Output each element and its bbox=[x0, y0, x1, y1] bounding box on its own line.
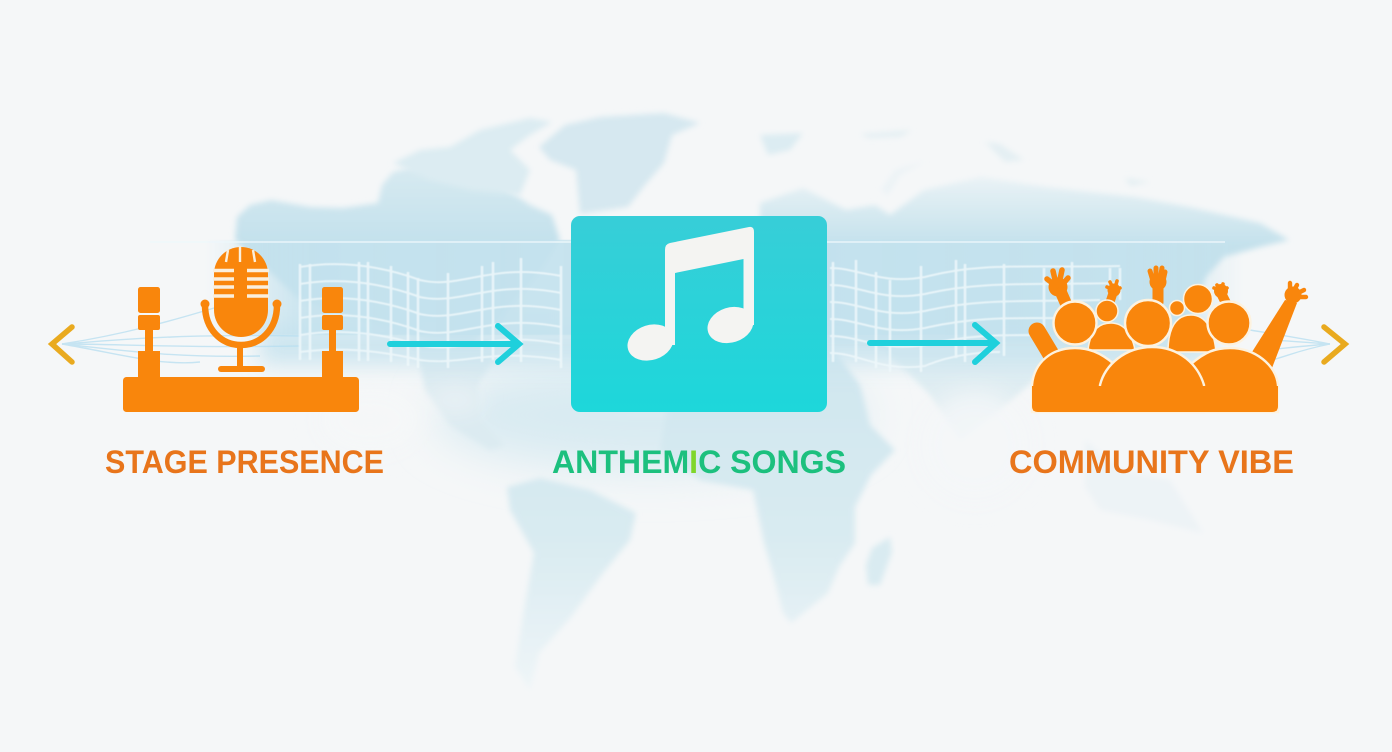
map: Greenland bbox=[539, 113, 700, 214]
map: Novaya Zemlya bbox=[881, 161, 925, 195]
mesh left bbox=[300, 258, 561, 368]
map band bbox=[205, 240, 1245, 335]
label: community vibe: COMMUNITY VIBE bbox=[1009, 444, 1294, 480]
map: small northern islands bbox=[860, 130, 1150, 186]
right stand bbox=[322, 287, 343, 379]
ocean haze centre bbox=[435, 360, 865, 470]
map: Africa bbox=[660, 345, 895, 623]
arrow: right chevron bbox=[1324, 327, 1345, 362]
back row people bbox=[1088, 284, 1216, 352]
map band lower glow bbox=[260, 325, 1210, 365]
left stand bbox=[138, 287, 160, 379]
world map backdrop bbox=[205, 113, 1289, 690]
map: North America bbox=[235, 155, 560, 345]
panel: music card bbox=[571, 216, 827, 412]
fan lines left bbox=[62, 300, 300, 363]
map: Arctic islands bbox=[393, 118, 552, 195]
arrow: stage to songs bbox=[390, 326, 519, 362]
arrow: songs to community bbox=[870, 325, 996, 362]
icon: stage with microphone bbox=[123, 246, 359, 412]
label: stage presence: STAGE PRESENCE bbox=[105, 444, 384, 480]
map: Svalbard bbox=[760, 133, 803, 155]
arrow: left chevron bbox=[52, 327, 72, 362]
raised arms and hands bbox=[1037, 268, 1306, 368]
fan lines right bbox=[1250, 330, 1330, 360]
crowd base bbox=[1032, 386, 1278, 412]
map: Eurasia bbox=[760, 177, 1289, 345]
front heads bbox=[1054, 300, 1250, 346]
stage platform bbox=[123, 377, 359, 412]
microphone bbox=[200, 246, 282, 372]
mesh right bbox=[830, 260, 1120, 372]
cloud patches bbox=[320, 388, 1030, 500]
map: South Asia bbox=[880, 345, 1180, 440]
label: anthemic songs: ANTHEMIC SONGS bbox=[552, 444, 846, 480]
map: Southeast Asia and Australia bbox=[1085, 440, 1203, 533]
teal card bbox=[571, 216, 827, 412]
map: South America bbox=[507, 478, 636, 690]
front bodies bbox=[1032, 347, 1278, 412]
icon: crowd bbox=[1032, 268, 1306, 412]
icon: music note bbox=[623, 227, 758, 366]
map: Madagascar bbox=[866, 537, 892, 585]
map: Central America bbox=[415, 340, 505, 450]
horizontal staff line bbox=[150, 241, 1225, 243]
